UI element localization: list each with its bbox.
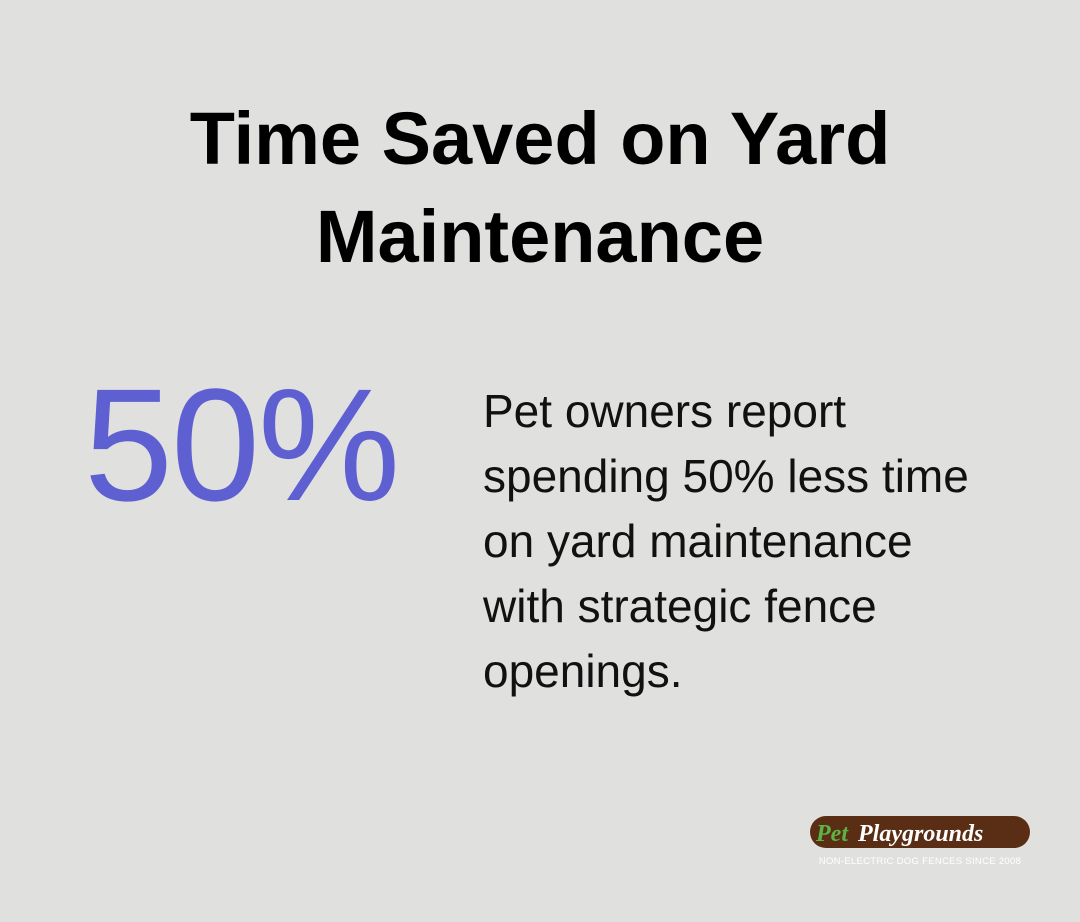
description text: on yard maintenance (483, 515, 913, 567)
logo (810, 816, 1030, 867)
logo: NON-ELECTRIC DOG FENCES SINCE 2008 (819, 856, 1021, 867)
logo: Playgrounds (857, 821, 983, 847)
big stat: 50% (84, 355, 398, 534)
description text: with strategic fence (483, 580, 877, 632)
description text (483, 385, 969, 697)
title: Time Saved on Yard (190, 97, 890, 180)
description text: Pet owners report (483, 385, 846, 437)
title (190, 97, 890, 278)
title: Maintenance (316, 195, 764, 278)
logo: Pet (815, 821, 849, 847)
description text: openings. (483, 645, 682, 697)
description text: spending 50% less time (483, 450, 969, 502)
